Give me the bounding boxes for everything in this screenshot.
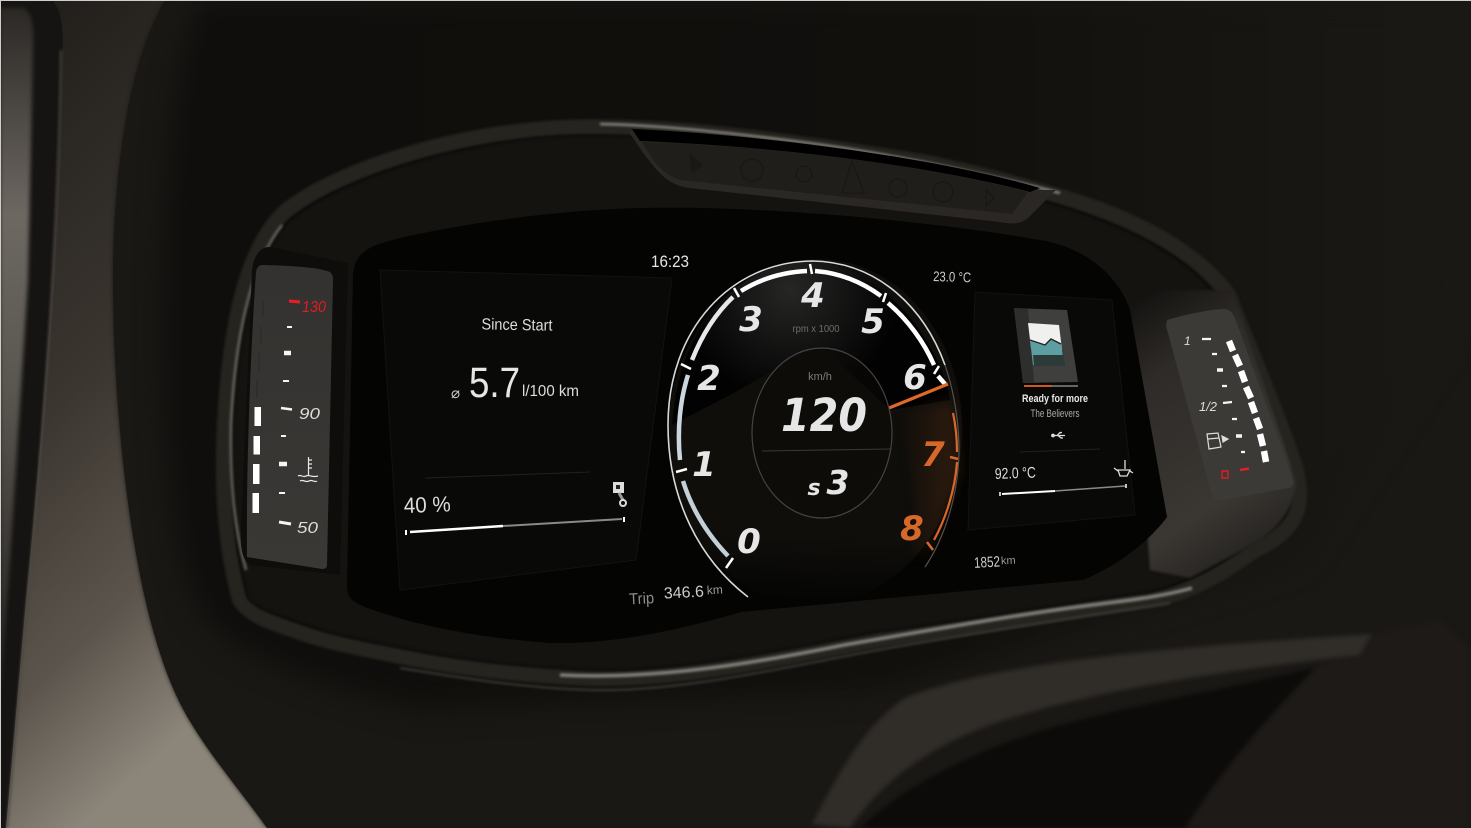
odometer readout: km — [1001, 555, 1016, 567]
icon: piston — [613, 482, 626, 506]
track title: Ready for more — [1022, 393, 1088, 405]
label: 130 — [289, 299, 326, 316]
left trim highlight — [231, 225, 282, 570]
speed circle — [752, 348, 892, 518]
gauge numerals: 5 — [861, 302, 885, 342]
consumption reading: l/100 km — [522, 383, 579, 400]
level bars — [252, 407, 261, 513]
scale ticks — [279, 327, 292, 524]
engine load reading: 40 % — [403, 491, 451, 518]
gear indicator: s — [807, 476, 821, 501]
track progress — [1024, 385, 1078, 387]
scale ticks — [1202, 339, 1245, 452]
label: 1: 1 — [1184, 334, 1191, 348]
gauge numerals: 7 — [921, 435, 945, 475]
lower right dash ridge — [812, 620, 1471, 828]
left pod: coolant temperature gauge — [247, 265, 333, 569]
trip readout — [629, 583, 724, 608]
right pod: fuel gauge — [1166, 309, 1293, 500]
gauge numerals: 2 — [697, 359, 721, 399]
label: 0 and reserve tick — [1222, 468, 1249, 478]
gear indicator — [807, 463, 849, 502]
instrument bezel with trim — [224, 124, 1299, 690]
trim shadow line — [232, 135, 1291, 670]
label: 130: 130 — [302, 299, 326, 316]
speed unit: km/h — [808, 371, 832, 383]
divider — [425, 472, 590, 478]
speed value: 120 — [781, 389, 867, 442]
rpm label: rpm x 1000 — [792, 323, 840, 335]
display tiles — [380, 270, 1135, 590]
trip readout: km — [706, 583, 723, 597]
label: 90: 90 — [299, 406, 320, 423]
left tile contents — [403, 316, 626, 535]
label: 1/2: 1/2 — [1199, 399, 1218, 414]
gauge numerals: 6 — [903, 358, 927, 398]
gauge numerals: 3 — [739, 300, 763, 340]
pod panel — [247, 265, 333, 569]
gauge face — [659, 252, 971, 612]
icon: usb — [1052, 432, 1065, 438]
oil temperature bar — [1000, 484, 1126, 496]
gauge numerals — [692, 276, 945, 562]
car pillar and lower-left trim — [0, 0, 267, 828]
icon: oil can — [1114, 460, 1133, 476]
bottom trim highlight — [560, 588, 1192, 676]
top trim highlight — [600, 124, 1060, 193]
icon: fuel pump — [1207, 433, 1228, 449]
gauge numerals: 8 — [900, 509, 924, 549]
white rev arc — [679, 271, 945, 556]
tick marks — [676, 264, 958, 568]
outer ring — [668, 261, 945, 597]
odometer readout: 1852 — [974, 553, 1000, 572]
divider — [1020, 449, 1100, 452]
album art — [1014, 308, 1078, 383]
outside temperature: 23.0 °C — [933, 268, 971, 285]
gauge numerals: 0 — [737, 522, 761, 562]
gear indicator: 3 — [827, 463, 849, 502]
level bars — [1229, 341, 1266, 462]
right side housing — [1130, 290, 1296, 578]
consumption reading: ⌀ — [451, 385, 460, 402]
artist: The Believers — [1030, 408, 1080, 420]
consumption reading — [451, 359, 579, 407]
icon: coolant thermometer — [298, 457, 318, 482]
main display screen — [347, 208, 1167, 643]
rev counter gauge — [659, 252, 971, 612]
clock: 16:23 — [651, 252, 689, 271]
trip readout: 346.6 — [663, 584, 704, 603]
label: 50: 50 — [297, 520, 318, 537]
unlit bars — [257, 301, 263, 398]
pod panel — [1166, 309, 1293, 500]
orange rev arc — [934, 413, 957, 540]
heading: since start: Since Start — [481, 316, 553, 335]
trip readout: Trip — [629, 590, 655, 608]
needle — [889, 384, 948, 408]
left side housing — [241, 247, 348, 575]
media tile — [995, 308, 1133, 496]
gauge numerals: 4 — [800, 276, 825, 316]
consumption reading: 5.7 — [469, 359, 520, 407]
gauge numerals: 1 — [692, 445, 716, 485]
bottom trim lip — [400, 603, 1170, 690]
warning telltale strip — [628, 129, 1056, 223]
oil temperature: 92.0 °C — [995, 465, 1036, 483]
engine load bar — [406, 517, 624, 535]
